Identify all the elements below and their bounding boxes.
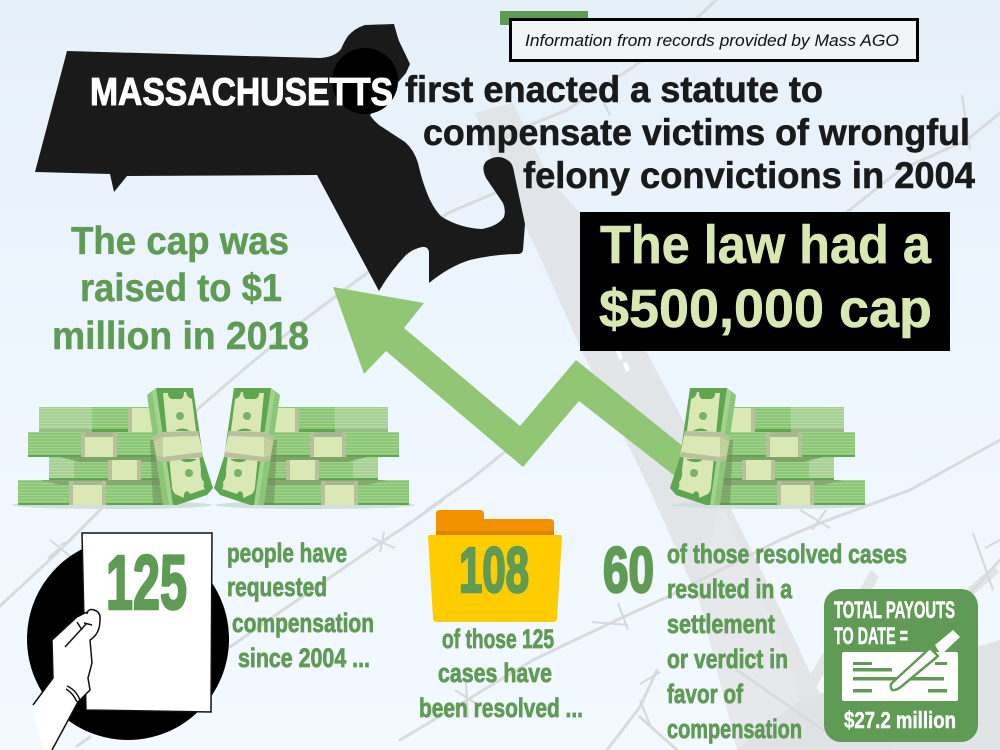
icon: money stacks left pair	[12, 388, 415, 509]
accent bar behind source note	[500, 11, 588, 25]
text: people have requested: people have	[227, 538, 347, 568]
title: compensate victims of wrongful	[423, 112, 970, 153]
text: people have requested	[227, 538, 374, 673]
panel: 125 requests	[27, 533, 374, 750]
text: total payouts to date: TO DATE =	[834, 623, 908, 650]
text: of those resolved cases: or verdict in	[667, 644, 788, 674]
text: total amount: $27.2 million	[844, 707, 956, 733]
text: of those resolved cases: settlement	[667, 609, 775, 639]
icon: map of Massachusetts	[35, 24, 525, 291]
text: of those 125	[419, 624, 583, 723]
icon: cheque and pen	[842, 630, 960, 701]
source note: Information from records provided by Mass AGO	[525, 32, 899, 50]
panel: total payouts	[824, 589, 978, 742]
text: of those resolved cases: favor of	[667, 679, 744, 709]
text: of those resolved cases: resulted in a	[667, 574, 793, 604]
text: of those 125: cases have	[438, 658, 552, 688]
panel: 60 in favor	[603, 534, 907, 744]
text: of those resolved cases: of those resolved cases	[667, 539, 907, 569]
callout: raised cap: million in 2018	[52, 315, 309, 358]
icon: hand holding paper	[27, 533, 229, 750]
callout: original cap: The law had a	[600, 215, 932, 275]
number 60: 60	[603, 534, 654, 606]
title: felony convictions in 2004	[523, 155, 975, 196]
arrow: rising cap	[333, 287, 690, 480]
text: people have requested: compensation	[232, 608, 374, 638]
number 108: 108	[459, 534, 529, 606]
text: of those 125: been resolved ...	[419, 693, 583, 723]
callout: original cap	[580, 212, 950, 351]
number 125: 125	[106, 540, 187, 626]
title: MASSACHUSETTS	[90, 71, 393, 114]
source note	[510, 20, 918, 60]
text: people have requested: since 2004 ...	[238, 643, 370, 673]
text: people have requested: requested	[227, 572, 327, 602]
panel: 108 resolved	[419, 510, 583, 723]
callout: original cap: $500,000 cap	[599, 279, 932, 339]
title: first enacted a statute to	[405, 69, 823, 110]
icon: folder	[428, 510, 562, 622]
callout: raised cap: raised to $1	[80, 267, 282, 310]
text: of those resolved cases: compensation	[667, 714, 802, 744]
title	[90, 69, 975, 196]
text: of those resolved cases	[667, 539, 907, 744]
callout: raised cap: The cap was	[71, 220, 289, 263]
icon: money stack right	[670, 388, 871, 509]
text: total payouts to date	[834, 597, 955, 650]
callout: raised cap	[52, 220, 309, 358]
text: of those 125: of those 125	[442, 624, 554, 654]
